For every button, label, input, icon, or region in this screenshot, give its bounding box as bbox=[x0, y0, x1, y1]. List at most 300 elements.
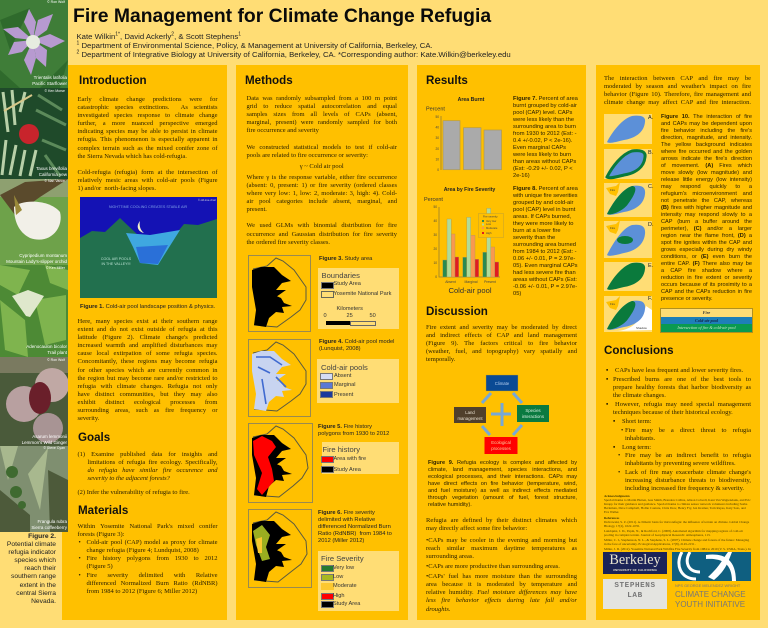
methods text: air pool categories include absent, marginal, and bbox=[246, 198, 397, 205]
figure 10 caption: entire CAP. (F) There also may be bbox=[661, 260, 752, 266]
figure 2 caption: refugia indicator bbox=[8, 549, 56, 556]
figure 7 caption: than areas without CAPs bbox=[513, 159, 576, 165]
figure 4 caption: (Lunquist, 2008) bbox=[319, 346, 361, 352]
figure 5 caption: polygons from 1930 to 2012 bbox=[318, 430, 389, 436]
figure 10 caption: CAP (burn a buffer around the bbox=[661, 218, 752, 224]
figure 8 chart: area by fire severity: Low bbox=[486, 222, 491, 226]
figure 8 chart: area by fire severity: Absent bbox=[445, 280, 456, 284]
legend: cold-air pools: Absent bbox=[334, 372, 351, 378]
discussion points text: relative humidity. Fuel moisture differences may have bbox=[426, 589, 577, 596]
logo: stephens lab: STEPHENS bbox=[614, 582, 656, 590]
materials text: • bbox=[78, 555, 81, 562]
figure 8 chart: area by fire severity: 10 bbox=[433, 261, 437, 265]
figure 10 caption: move slowly (low magnitude) and bbox=[661, 170, 752, 176]
figure 8 chart: area by fire severity: 20 bbox=[433, 247, 437, 251]
methods text: Where γ is the response variable, either fire occurrence bbox=[246, 174, 397, 181]
figure 8 caption: pool (CAP) level in burnt bbox=[513, 207, 575, 213]
figure 9 caption: Figure 9. Refugia ecology is complex and affected by bbox=[428, 460, 577, 466]
figure 9 caption: and fuel moisture) as well as indirect effects mediated bbox=[428, 488, 577, 494]
figure 9: refugia ecology diagram: processes bbox=[491, 446, 511, 451]
authors and affiliations: Kate Wilkin1*, David Ackerly2, & Scott Stephens1 bbox=[76, 31, 241, 40]
figure 1: cold-air pool landscape: © old-tree-chart bbox=[198, 198, 216, 202]
legend: boundaries: Boundaries bbox=[322, 271, 360, 280]
conclusions list: techniques because of their historical ecology. bbox=[613, 409, 733, 416]
discussion text: temporally. bbox=[426, 356, 455, 363]
conclusions list: Fire may be a direct threat to refugia bbox=[625, 427, 751, 434]
initiative wordmark bbox=[675, 583, 746, 608]
heading: materials: Materials bbox=[78, 504, 128, 517]
figure 10 colour key: Fire bbox=[703, 310, 710, 315]
methods text: γ ~ Cold air pool bbox=[300, 163, 344, 170]
figure 2 caption: southern range bbox=[11, 573, 56, 580]
goals text bbox=[78, 451, 218, 496]
legend: fire severity: Moderate bbox=[333, 583, 357, 589]
conclusions list: ▪ bbox=[606, 401, 608, 408]
goals text: limitations of refugia fire ecology. Specifically, bbox=[88, 459, 218, 466]
figure 10 caption: where fire occurred and the golden bbox=[661, 148, 752, 154]
acknowledgments and references: Lundquist, J. D., Pepin, N., & Rochford, C. (2008). Automated algorithm for mapping regions of cold-air pooling in complex terrain. Journal of Geophysical Research: Atmospheres, 113. bbox=[604, 529, 743, 537]
figure 10 caption: perimeter), (C) and/or a larger bbox=[661, 226, 752, 232]
figure 8 chart: area by fire severity: Percent bbox=[424, 197, 443, 203]
figure 6 caption: differenced Normalized Burn bbox=[318, 524, 391, 530]
figure 10: fire and CAP interaction diagrams: Shadow bbox=[636, 326, 648, 330]
discussion text: Fire extent and severity may be moderated by direct bbox=[426, 324, 577, 331]
figure 9: refugia ecology diagram: Land bbox=[465, 410, 475, 415]
conclusions list: ▪ bbox=[606, 367, 608, 374]
figure 8 caption: they were more likely to bbox=[513, 221, 573, 227]
legend: boundaries: Kilometers bbox=[336, 306, 363, 312]
species labels on photos: © Ken Miller bbox=[46, 266, 65, 270]
methods text: present. bbox=[246, 206, 267, 213]
materials text: • bbox=[78, 539, 81, 546]
legend: fire history: Study Area bbox=[334, 466, 361, 472]
legend: fire severity: Study Area bbox=[333, 600, 360, 606]
introduction text: refugia. This phenomenon is especially apparent in bbox=[78, 136, 218, 143]
figure 10: fire and CAP interaction diagrams: Fire bbox=[610, 226, 615, 230]
introduction text: further, a more nuanced perspective emerged bbox=[78, 120, 218, 127]
figure 6: fire severity map bbox=[248, 509, 312, 588]
figure 7 caption: pool (CAP) level. CAPs bbox=[513, 110, 572, 116]
figure 8 caption: severity than the bbox=[513, 235, 555, 241]
figure 8 chart: area by fire severity: Marginal bbox=[464, 280, 478, 284]
figure 8 caption: burn at a lower fire bbox=[513, 228, 561, 234]
legend: boundaries bbox=[318, 268, 399, 329]
acknowledgments and references: Miller, J. D. (2012). Yosemite National Park Wildfire Fire Severity from 1984 to 2010 (V. S. USDA, Trans.). In U.S. USDA (Ed.). McClellan, CA. bbox=[604, 547, 751, 555]
figure 10: fire and CAP interaction diagrams: Fire bbox=[610, 302, 615, 306]
species labels on photos: © Ron Wolf bbox=[47, 0, 65, 4]
introduction text: Cold-refugia (refugia) form at the intersection of bbox=[78, 169, 218, 176]
figure 6 caption: 2012 (Miller 2012) bbox=[318, 538, 364, 544]
figure 4 caption bbox=[319, 338, 394, 352]
panel: left column lower extension bbox=[62, 532, 227, 620]
species labels on photos: Mountain Lady's-slipper orchid bbox=[6, 259, 67, 264]
context text: for other species which are currently common in bbox=[78, 367, 218, 374]
figure 7 caption: were less likely than the bbox=[513, 117, 574, 123]
species labels on photos: California yew bbox=[39, 172, 67, 177]
figure 8 caption: Figure 8. Percent of area bbox=[513, 186, 578, 192]
right column intro text bbox=[604, 75, 751, 106]
figure 8 caption: 0.06 +/- 0.01, P = 2.97e- bbox=[513, 256, 575, 262]
figure 2 caption: species which bbox=[14, 557, 56, 564]
introduction text: investigated species response to climate change bbox=[78, 112, 218, 119]
figure 8 chart: area by fire severity: Cold-air pool bbox=[448, 286, 492, 295]
species labels on photos: Sierra coffeeberry bbox=[31, 525, 67, 530]
heading: methods: Methods bbox=[245, 74, 293, 87]
legend: boundaries: 0 bbox=[324, 312, 327, 318]
figure 7 caption: Figure 7. Percent of area bbox=[513, 96, 578, 102]
legend: cold-air pools: Marginal bbox=[334, 382, 355, 388]
methods text: We used GLMs with binomial distribution for fire bbox=[246, 222, 397, 229]
conclusions list: inhabitants by preventing severe wildfires. bbox=[625, 460, 736, 467]
legend: cold-air pools: Present bbox=[334, 392, 353, 398]
figure 10: fire and CAP interaction diagrams bbox=[604, 114, 654, 332]
figure 4 caption: Figure 4. Cold-air pool model bbox=[319, 338, 394, 344]
introduction text bbox=[78, 96, 218, 192]
figure 7 chart: area burnt: Area Burnt bbox=[458, 97, 485, 103]
figure 9 caption bbox=[428, 460, 577, 508]
figure 6 caption bbox=[318, 510, 392, 544]
species labels on photos: © Nan Vance bbox=[44, 179, 65, 183]
species labels on photos: © Ron Wolf bbox=[47, 358, 65, 362]
discussion points text: •CAPs may be cooler in the evening and morning but bbox=[426, 537, 577, 544]
introduction text: complex terrain such as the mixed conifer zone of bbox=[78, 145, 218, 152]
title: Fire Management for Climate Change Refugia bbox=[73, 5, 491, 27]
context text: have distinct communities, but they may also bbox=[78, 391, 218, 398]
figure 10 caption: a CAP fire shadow where a bbox=[661, 268, 752, 274]
figure 9: refugia ecology diagram: Ecological bbox=[491, 440, 511, 445]
conclusions list: However, refugia may need special management bbox=[615, 401, 751, 408]
context text: severity. bbox=[78, 415, 99, 422]
conclusions list: ▪ bbox=[606, 376, 608, 383]
figure 7 caption: surrounding area to burn bbox=[513, 124, 576, 130]
figure 9 caption: through vegetation (amount of fuel, forest structure, bbox=[428, 495, 577, 501]
conclusions list bbox=[606, 367, 751, 492]
initiative wordmark: YOUTH INITIATIVE bbox=[675, 600, 745, 608]
discussion text bbox=[426, 324, 577, 363]
introduction text: 1) and/or north-facing slopes. bbox=[78, 185, 156, 192]
materials text: • bbox=[78, 572, 81, 579]
figure 9 caption: ecological processes, and their interactions. CAPs may bbox=[428, 474, 577, 480]
context text bbox=[78, 318, 218, 422]
conclusions list: increasing disturbance threats to biodiversity, bbox=[625, 477, 751, 484]
legend: boundaries: 50 bbox=[370, 312, 376, 318]
authors and affiliations: 2 Department of Integrative Biology at University of California, Berkeley, CA. *Corresponding author: Kate.Wilkin@berkeley.edu bbox=[76, 50, 511, 59]
figure 9: refugia ecology diagram: interactions bbox=[522, 414, 544, 419]
figure 10 colour key: Intersection of fire & cold-air pool bbox=[677, 325, 736, 330]
right column intro text: The interaction between CAP and fire may be bbox=[604, 75, 751, 82]
species labels on photos: Asarum lemmonii bbox=[32, 434, 67, 439]
figure 10 caption: Figure 10. The interaction of fire bbox=[661, 114, 752, 120]
figure 5 caption: Figure 5. Fire history bbox=[318, 424, 372, 430]
figure 8 caption bbox=[513, 186, 578, 297]
goals text: (2) Infer the vulnerability of refugia to fire. bbox=[78, 489, 190, 496]
discussion text: (Figure 9). The factors critical to fire behavior bbox=[426, 340, 577, 347]
figure 10: fire and CAP interaction diagrams: D. bbox=[648, 222, 654, 228]
discussion points text: area because it is moderated by temperature and bbox=[426, 581, 577, 588]
legend: cold-air pools: Cold-air pools bbox=[321, 363, 368, 372]
figure 8 caption: 05). Even marginal CAPs bbox=[513, 263, 578, 269]
goals text: severity to the adjacent forests? bbox=[88, 475, 170, 482]
figure 8 chart: area by fire severity: Very low bbox=[486, 219, 496, 223]
figure 10 caption bbox=[661, 114, 752, 302]
authors and affiliations bbox=[76, 31, 511, 59]
figure 7 chart: area burnt: 10 bbox=[435, 157, 439, 161]
methods text: marginal, present) were randomly sampled for both bbox=[246, 119, 397, 126]
context text: increased warmth and amplified disturbances may bbox=[78, 342, 218, 349]
context text: exhibit distinct ecological processes from bbox=[78, 399, 218, 406]
figure 10: fire and CAP interaction diagrams: B. bbox=[648, 150, 654, 156]
figure 1: cold-air pool landscape bbox=[80, 197, 217, 298]
discussion text: and indirect effects of CAP and land management bbox=[426, 332, 577, 339]
figure 7 chart: area burnt: 40 bbox=[435, 126, 439, 130]
legend: fire severity: Very low bbox=[333, 565, 354, 571]
heading: introduction: Introduction bbox=[79, 74, 147, 87]
methods text: (absent: 0, present: 1) or fire severity (ordered classes bbox=[246, 182, 397, 189]
figure 1: cold-air pool landscape: IN THE VALLEY!!! bbox=[101, 262, 131, 266]
context text: Here, many species exist at their southern range bbox=[78, 318, 218, 325]
figure 3: study area map bbox=[248, 255, 311, 332]
figure 8 chart: area by fire severity: Fire severity bbox=[483, 214, 498, 218]
figure 10 caption: conditions, or (E) even burn the bbox=[661, 254, 752, 260]
figure 3 caption: Figure 3. Study area bbox=[319, 256, 372, 262]
methods text: fire occurrence and severity bbox=[246, 127, 319, 134]
figure 7 caption: were less likely to burn bbox=[513, 152, 571, 158]
figure 10 caption: The yellow background indicates bbox=[661, 142, 752, 148]
discussion points text: Refugia are defined by their distinct climates which bbox=[426, 517, 577, 524]
figure 8 chart: area by fire severity: 30 bbox=[433, 233, 437, 237]
panel: left column background bbox=[68, 65, 227, 620]
figure 10 caption: reduction in fire extent or severity bbox=[661, 274, 752, 280]
conclusions list: including increased fire frequency & severity. bbox=[625, 485, 744, 492]
figure 10 caption: not penetrate the CAP, whereas bbox=[661, 198, 752, 204]
right column intro text: climate change may affect CAP and fire interaction. bbox=[604, 99, 751, 106]
legend: fire history bbox=[322, 442, 399, 474]
methods text: the ordered fire severity classes. bbox=[246, 239, 330, 246]
figure 10 colour key bbox=[660, 308, 753, 333]
methods text bbox=[246, 95, 397, 246]
right column intro text: behavior (Figure 10). Therefore, fire management and bbox=[604, 91, 751, 98]
initiative wordmark: NPS GEORGE MELENDEZ WRIGHT bbox=[675, 583, 740, 588]
figure 10 caption: of movement. (A) Fires which bbox=[661, 162, 752, 168]
figure 9 caption: climate, land management, species interactions, and bbox=[428, 467, 577, 473]
heading: goals: Goals bbox=[78, 431, 110, 444]
discussion points text: reach similar maximum daytime temperatures as bbox=[426, 545, 577, 552]
heading: discussion: Discussion bbox=[426, 305, 488, 318]
legend: fire severity: Low bbox=[333, 574, 343, 580]
materials text: forests (Figure 3): bbox=[78, 531, 124, 538]
discussion points text: less fire behavior effects during late fall and/or bbox=[426, 597, 577, 604]
figure 10 caption: occurs because of its proximity to a bbox=[661, 282, 752, 288]
methods text: pools are related to fire occurrence or severity: bbox=[246, 152, 368, 159]
goals text: do refugia have similar fire occurence and bbox=[88, 467, 218, 474]
figure 6 caption: Ratio (RdNBR) from 1984 to bbox=[318, 530, 392, 536]
figure 1: cold-air pool landscape: COOL AIR POOLS bbox=[101, 257, 132, 261]
legend: boundaries: 25 bbox=[346, 312, 353, 318]
figure 10: fire and CAP interaction diagrams: E. bbox=[648, 263, 654, 269]
conclusions list: CAPs have less frequent and lower severity fires. bbox=[615, 367, 743, 374]
figure 10 caption: refugium's microenvironment and bbox=[661, 190, 752, 196]
figure 8 chart: area by fire severity: 40 bbox=[433, 219, 437, 223]
conclusions list: prepare healthy forests that harbor biodiversity as bbox=[613, 384, 751, 391]
discussion points text bbox=[426, 517, 577, 613]
acknowledgments and references: Miller, C. I., Stephenson, N. L., & Stephens, S. L. (2007). Climate change and forests of the future: Managing in the face of uncertainty. Ecological Applications, 17(8), 2145-2151. bbox=[604, 538, 749, 546]
figure 8 chart: area by fire severity: High bbox=[486, 231, 492, 235]
figure 7 chart: area burnt: 0 bbox=[437, 168, 439, 172]
figure 9 caption: have direct effects on fire behavior (temperature, wind, bbox=[428, 481, 577, 487]
context text: surrounding areas, such as fire frequency or bbox=[78, 407, 218, 414]
figure 10: fire and CAP interaction diagrams: F. bbox=[648, 296, 653, 302]
figure 8 caption: with unique fire severities bbox=[513, 193, 578, 199]
figure 2 caption: central Sierra bbox=[16, 590, 56, 597]
figure 10 caption: spot fire ignites within the CAP and bbox=[661, 240, 752, 246]
conclusions list: Long term: bbox=[622, 444, 651, 451]
figure 8 chart: area by fire severity: Area by Fire Severity bbox=[444, 187, 495, 193]
panel: results and discussion column bbox=[417, 65, 586, 620]
conclusions list: the climate changes. bbox=[613, 392, 666, 399]
heading: conclusions: Conclusions bbox=[604, 344, 674, 357]
figure 9: refugia ecology diagram: management bbox=[457, 416, 483, 421]
legend: boundaries: Yosemite National Park bbox=[334, 290, 391, 296]
introduction text: catastrophic species extinctions. As scientists bbox=[78, 104, 218, 111]
context text: cause local extirpation of some refugia species. bbox=[78, 350, 218, 357]
legend: fire history: Area with fire bbox=[334, 456, 366, 462]
conclusions list: • bbox=[618, 452, 620, 459]
legend: fire history: Fire history bbox=[322, 445, 360, 454]
figure 8 chart: area by fire severity: Moderate bbox=[486, 226, 498, 230]
figure 7 chart: area burnt: 30 bbox=[435, 136, 439, 140]
figure 10: fire and CAP interaction diagrams: C. bbox=[648, 184, 654, 190]
species labels on photos: Cypripedium montanum bbox=[19, 253, 67, 258]
acknowledgments and references: References bbox=[604, 516, 619, 520]
methods text: where very low: 1, low: 2, moderate: 3, high: 4). Cold- bbox=[246, 190, 397, 197]
figure 10 caption: presence or severity. bbox=[661, 296, 713, 302]
logo: berkeley: UNIVERSITY OF CALIFORNIA bbox=[613, 568, 657, 572]
figure 2 caption: Figure 2. bbox=[28, 533, 56, 540]
conclusions list: Prescribed burns are one of the best tools to bbox=[613, 376, 751, 383]
conclusions list: • bbox=[621, 427, 623, 434]
figure 2 caption: Nevada. bbox=[31, 598, 56, 605]
materials text: Fire history polygons from 1930 to 2012 bbox=[86, 555, 218, 562]
materials text: (Figure 5) bbox=[86, 563, 113, 570]
figure 8 chart: area by fire severity: 50 bbox=[433, 205, 437, 209]
discussion points text: •CAPs' fuel has more moisture than the surrounding bbox=[426, 573, 577, 580]
right column intro text: moderated by season and weather's impact on fire bbox=[604, 83, 751, 90]
figure 8 chart: area by fire severity: 0 bbox=[435, 275, 437, 279]
figure 7 chart: area burnt: Percent bbox=[426, 106, 445, 112]
figure 10 caption: grows especially during dry windy bbox=[661, 246, 752, 252]
species labels on photos: Pacific Starflower bbox=[32, 81, 67, 86]
photo strip: refugia indicator species bbox=[0, 0, 68, 532]
discussion text: (weather, fuel, and topography) vary spatially and bbox=[426, 348, 577, 355]
methods text: We constructed statistical models to test if cold-air bbox=[246, 144, 397, 151]
materials text: Fire severity delimited with Relative bbox=[86, 572, 218, 579]
conclusions list: ▪ bbox=[613, 444, 615, 451]
figure 9: refugia ecology diagram: Species bbox=[525, 408, 541, 413]
figure 2 caption: extent in the bbox=[20, 582, 56, 589]
context text: extent and do not exist outside of refugia at this bbox=[78, 326, 218, 333]
figure 5: fire history map bbox=[248, 423, 313, 503]
figure 7 caption: Even marginal CAPs bbox=[513, 145, 566, 151]
figure 2 caption bbox=[7, 533, 56, 605]
materials text: Cold-air pool (CAP) model as proxy for climate bbox=[86, 539, 218, 546]
figure 10: fire and CAP interaction diagrams: A. bbox=[648, 115, 654, 121]
figure 4: cold-air pool model map bbox=[248, 339, 311, 417]
figure 10 caption: fire behavior including the fire's bbox=[661, 128, 752, 134]
figure 1: cold-air pool landscape: NIGHTTIME COOLING CREATES STABLE AIR bbox=[109, 205, 188, 209]
introduction text: relatively mesic areas with cold-air pools (Figure bbox=[78, 177, 218, 184]
conclusions list: Lack of fire may exacerbate climate change's bbox=[625, 469, 751, 476]
figure 10 caption: and CAPs may be dependent upon bbox=[661, 120, 752, 126]
legend: fire severity: Fire Severity bbox=[321, 554, 364, 563]
figure 7 caption: 2e-16) bbox=[513, 173, 530, 179]
materials text: change refugia (Figure 4; Lundquist, 2008) bbox=[86, 547, 199, 554]
figure 8 chart: area by fire severity bbox=[424, 187, 504, 295]
figure 10: fire and CAP interaction diagrams: Fire bbox=[610, 188, 615, 192]
figure 10 caption: intensity may respond slowly to a bbox=[661, 212, 752, 218]
species labels on photos: Adenocaulon bicolor bbox=[26, 344, 67, 349]
figure 7 caption bbox=[513, 96, 578, 179]
figure 7 caption: (Est: -0.29 +/- 0.02, P < bbox=[513, 166, 573, 172]
context text: refugia with climate changes. Refugia not only bbox=[78, 383, 218, 390]
species labels on photos: Trientalis latifolia bbox=[34, 75, 67, 80]
methods text: Data was randomly subsampled from a 100 m point bbox=[246, 95, 397, 102]
figure 7 caption: burnt grouped by cold-air bbox=[513, 103, 577, 109]
context text: the region but may become rare and/or restricted to bbox=[78, 375, 218, 382]
methods text: grid to reduce spatial autocorrelation and equal bbox=[246, 103, 397, 110]
figure 5 caption bbox=[318, 424, 390, 436]
discussion points text: •CAPs are more productive than surrounding areas. bbox=[426, 563, 560, 570]
panel: methods column bbox=[236, 65, 408, 620]
materials text: from 1984 to 2012 (Figure 6; Miller 2012) bbox=[86, 588, 197, 595]
introduction text: the Sierra Nevada which has cold-refugia. bbox=[78, 153, 187, 160]
initiative wordmark: CLIMATE CHANGE bbox=[675, 590, 746, 598]
context text: Concomitantly, these regions may become refugia bbox=[78, 358, 218, 365]
species labels on photos: Frangula rubra bbox=[37, 519, 67, 524]
panel: right column bbox=[596, 65, 760, 620]
figure 8 caption: -0.06 +/- 0.01, P = 2.97e- bbox=[513, 284, 577, 290]
figure 7 chart: area burnt: 20 bbox=[435, 147, 439, 151]
figure 10 colour key: Cold-air pool bbox=[695, 318, 718, 323]
materials text: Within Yosemite National Park's mixed conifer bbox=[78, 523, 218, 530]
figure 10 caption: release little energy (low intensity) bbox=[661, 176, 752, 182]
legend: fire severity bbox=[318, 551, 399, 611]
species labels on photos: Trail plant bbox=[47, 350, 67, 355]
context text: latitude (Figure 2). Climate change's predicted bbox=[78, 334, 218, 341]
figure 7 chart: area burnt bbox=[426, 97, 502, 172]
discussion points text: droughts. bbox=[426, 606, 450, 613]
materials text bbox=[78, 523, 218, 595]
figure 6 caption: delimited with Relative bbox=[318, 516, 375, 522]
species labels on photos: Lemmon's Wild Ginger bbox=[22, 440, 67, 445]
species labels on photos: © Steve Cyan bbox=[43, 446, 65, 450]
figure 7 caption: 0.4 +/-0.02, P < 2e-16). bbox=[513, 138, 572, 144]
species labels on photos: © Ken Morse bbox=[45, 89, 65, 93]
logo: stephens lab: LAB bbox=[627, 592, 643, 600]
methods text: samples sizes from all levels of CAPs (absent, bbox=[246, 111, 397, 118]
figure 2 caption: Potential climate bbox=[7, 541, 56, 548]
conclusions list: Fire may be an indirect benefit to refugia bbox=[625, 452, 751, 459]
logo: berkeley: Berkeley bbox=[609, 552, 661, 568]
conclusions list: • bbox=[618, 469, 620, 476]
figure 8 chart: area by fire severity: Present bbox=[484, 280, 496, 284]
legend: boundaries: Study Area bbox=[334, 281, 361, 287]
conclusions list: inhabitants. bbox=[625, 435, 655, 442]
figure 8 caption: had less severe fire than bbox=[513, 270, 576, 276]
figure 8 caption: from 1984 to 2012 (Est: - bbox=[513, 249, 577, 255]
acknowledgments and references bbox=[604, 494, 751, 555]
acknowledgments and references: Acknowledgments bbox=[604, 494, 630, 498]
species labels on photos bbox=[6, 0, 67, 530]
